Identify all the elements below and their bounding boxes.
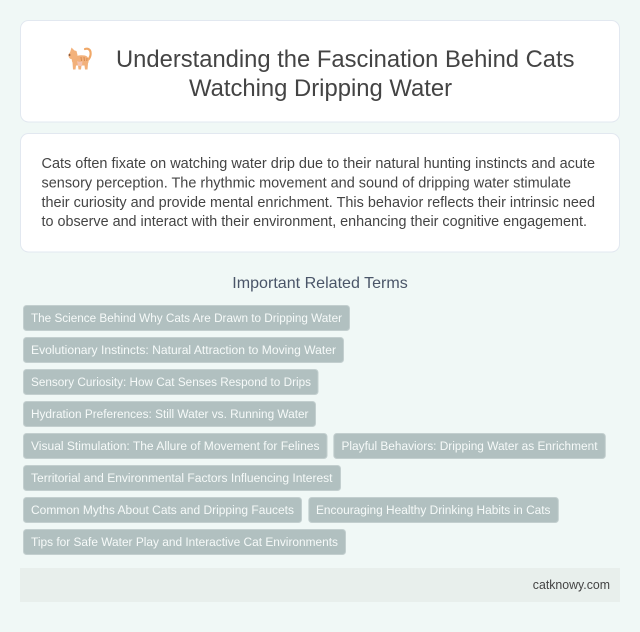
tag (309, 498, 558, 522)
paragraph text: sensory perception. The rhythmic movement and sound of dripping water stimulate (42, 176, 571, 192)
title: Watching Dripping Water (189, 75, 452, 102)
tag: Sensory Curiosity: How Cat Senses Respond to Drips (31, 375, 311, 389)
heading: important related terms: Important Related Terms (232, 275, 408, 292)
tag (24, 498, 302, 522)
tag (24, 530, 346, 554)
tag list (24, 306, 605, 554)
tag (24, 370, 318, 394)
footer bar (20, 568, 620, 602)
tag: Territorial and Environmental Factors Influencing Interest (31, 471, 333, 485)
title (116, 46, 574, 102)
icon: cat (68, 48, 91, 70)
tag: Tips for Safe Water Play and Interactive Cat Environments (31, 535, 338, 549)
paragraph text: their curiosity and provide mental enrichment. This behavior reflects their intrinsic need (42, 195, 595, 211)
paragraph text (42, 156, 595, 230)
panel: intro paragraph (20, 134, 620, 252)
paragraph text: Cats often fixate on watching water drip due to their natural hunting instincts and acute (42, 156, 595, 172)
tag: Encouraging Healthy Drinking Habits in Cats (316, 503, 550, 517)
tag (24, 402, 316, 426)
tag: Evolutionary Instincts: Natural Attraction to Moving Water (31, 343, 336, 357)
tag (24, 306, 350, 330)
panel: title card (20, 20, 620, 122)
footer source text: catknowy.com (533, 577, 610, 592)
tag: Playful Behaviors: Dripping Water as Enrichment (342, 439, 598, 453)
tag: The Science Behind Why Cats Are Drawn to Dripping Water (31, 311, 342, 325)
tag (334, 434, 605, 458)
title: Understanding the Fascination Behind Cats (116, 46, 574, 73)
tag: Visual Stimulation: The Allure of Movement for Felines (31, 439, 320, 453)
tag: Hydration Preferences: Still Water vs. Running Water (31, 407, 308, 421)
tag (24, 434, 327, 458)
tag (24, 338, 344, 362)
tag (24, 466, 340, 490)
paragraph text: to observe and interact with their environment, enhancing their cognitive engagement. (42, 214, 587, 230)
tag: Common Myths About Cats and Dripping Faucets (31, 503, 294, 517)
